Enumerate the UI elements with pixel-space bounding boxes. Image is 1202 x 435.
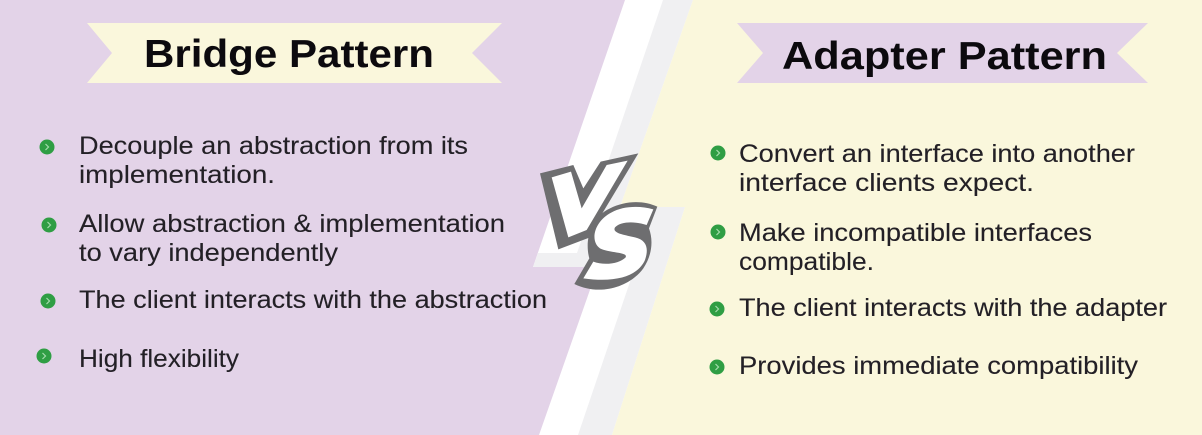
bullet item: decouple: Decouple an abstraction from its [79,132,468,160]
heading: bridge pattern ribbon [87,23,502,83]
panel: bridge pattern purple side [0,0,625,435]
bullet item: client interacts with adapter: The client interacts with the adapter [739,294,1167,322]
letter V [540,153,638,249]
list: bridge pattern points [36,132,547,373]
heading: adapter pattern ribbon [737,23,1148,83]
bullet item: convert interface: Convert an interface into another [739,140,1135,168]
bullet item: make compatible: compatible. [739,248,874,276]
bullet item: vary independently: Allow abstraction & implementation [79,210,505,238]
bullet item: immediate compatibility: Provides immediate compatibility [739,352,1139,380]
bullet item: make compatible [710,219,1092,276]
bullet item: make compatible: Make incompatible interfaces [739,219,1092,247]
bullet item: high flexibility: High flexibility [79,345,240,373]
bullet item: vary independently: to vary independently [79,239,339,267]
bullet item: decouple [40,132,468,189]
panel: adapter pattern yellow side [612,0,1202,435]
lightning divider: gray band [533,0,693,435]
heading: bridge pattern ribbon: Bridge Pattern [144,33,434,76]
bullet item: convert interface [710,140,1135,197]
bullet item: client interacts with abstraction: The client interacts with the abstraction [79,286,547,314]
letter S [574,202,657,290]
heading: adapter pattern ribbon: Adapter Pattern [782,35,1107,78]
list: adapter pattern points [710,140,1167,380]
icon: VS badge [540,153,657,290]
bullet item: vary independently [42,210,505,267]
bullet item: convert interface: interface clients expect. [739,169,1034,197]
bullet item: decouple: implementation. [79,161,275,189]
